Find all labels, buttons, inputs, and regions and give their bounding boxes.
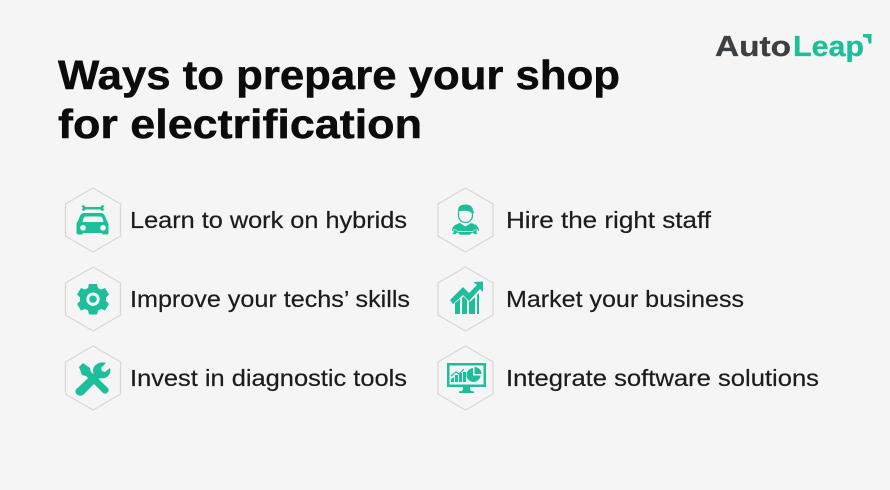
item: learn to work on hybrids [66, 188, 407, 252]
item: integrate software solutions [438, 346, 819, 410]
label: Hire the right staff [506, 207, 712, 233]
item: hire the right staff [438, 188, 712, 252]
title: for electrification [58, 101, 422, 147]
label: Market your business [506, 286, 744, 312]
title: Ways to prepare your shop [58, 52, 620, 98]
label: Invest in diagnostic tools [130, 365, 407, 391]
logo: AutoLeap [715, 31, 872, 63]
hexagon and tools icon [66, 346, 120, 410]
item: invest in diagnostic tools [66, 346, 407, 410]
hexagon and growth chart icon [438, 267, 493, 331]
label: Improve your techs’ skills [130, 286, 410, 312]
label: Learn to work on hybrids [130, 207, 407, 233]
label: Integrate software solutions [506, 365, 819, 391]
hexagon and gear icon [66, 267, 120, 331]
item: market your business [438, 267, 744, 331]
hexagon and monitor icon [438, 346, 493, 410]
hexagon and mechanic icon [438, 188, 493, 252]
logo: AutoLeap: Auto [715, 31, 791, 63]
item: improve your techs' skills [66, 267, 410, 331]
logo: AutoLeap: Leap [793, 31, 864, 63]
title [58, 52, 620, 147]
hexagon and car icon [66, 188, 120, 252]
